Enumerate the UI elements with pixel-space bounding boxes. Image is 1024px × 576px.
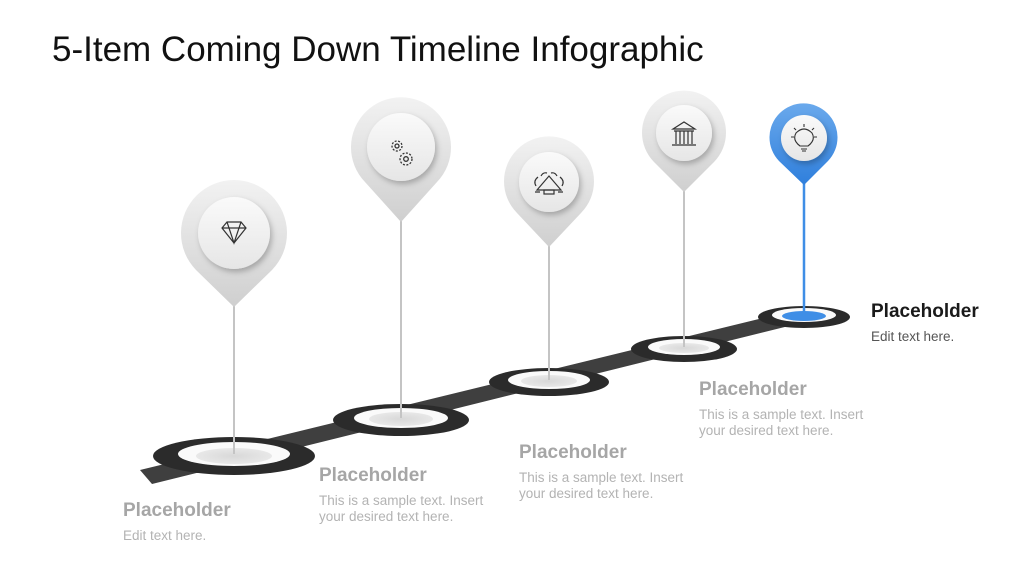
icon: meeting table	[535, 173, 563, 194]
text: item 2: This is a sample text. Insert	[319, 493, 483, 508]
text: item 4: your desired text here.	[699, 423, 833, 438]
road	[140, 309, 805, 484]
text: item 1	[123, 500, 231, 543]
text: item 5: Placeholder	[871, 301, 979, 322]
item 5 (highlighted)	[758, 103, 850, 328]
item 1	[153, 180, 315, 475]
text: item 4: This is a sample text. Insert	[699, 407, 863, 422]
text: item 3: This is a sample text. Insert	[519, 470, 683, 485]
text: item 3	[519, 442, 684, 501]
icon: diamond	[222, 222, 246, 243]
text: item 3: Placeholder	[519, 442, 627, 463]
item 2	[333, 97, 469, 436]
title: 5-Item Coming Down Timeline Infographic	[52, 30, 704, 69]
text: item 4: Placeholder	[699, 379, 807, 400]
item 4	[631, 91, 737, 362]
text: item 5: Edit text here.	[871, 329, 954, 344]
text: item 4	[699, 379, 864, 438]
text: item 2: your desired text here.	[319, 509, 453, 524]
text: item 5	[871, 301, 979, 344]
text: item 2: Placeholder	[319, 465, 427, 486]
text: item 3: your desired text here.	[519, 486, 653, 501]
icon: bank	[672, 122, 696, 145]
icon: bulb	[791, 124, 817, 151]
item 3	[489, 136, 609, 396]
icon: gears	[392, 141, 412, 165]
text: item 1: Edit text here.	[123, 528, 206, 543]
text: item 1: Placeholder	[123, 500, 231, 521]
text: item 2	[319, 465, 484, 524]
